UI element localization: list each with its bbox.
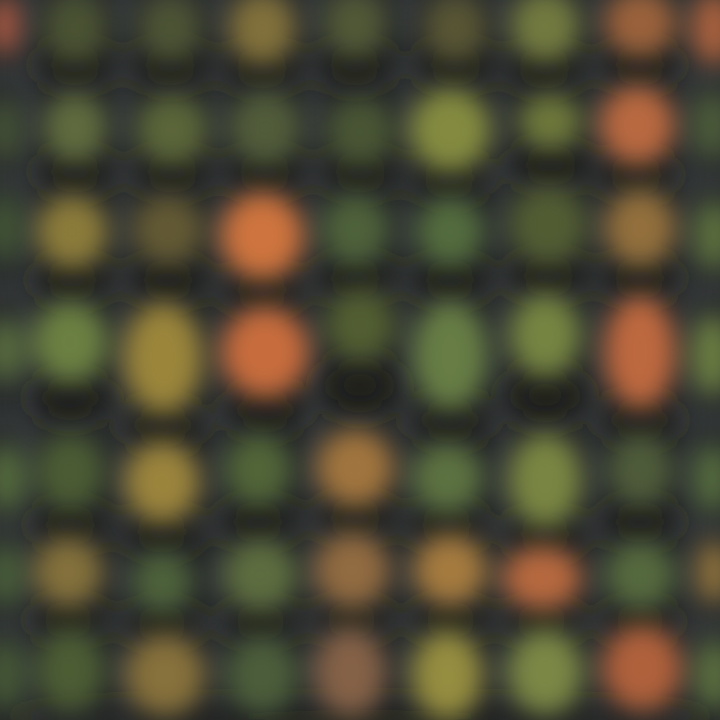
- row 3 blobs: [0, 185, 720, 280]
- row 5 blobs: [0, 429, 720, 527]
- row 6 blobs: [0, 532, 720, 613]
- row 7 blobs: [0, 625, 720, 720]
- row 1 blobs: [0, 0, 720, 65]
- row 4 blobs: [0, 289, 720, 414]
- row 2 blobs: [0, 85, 720, 172]
